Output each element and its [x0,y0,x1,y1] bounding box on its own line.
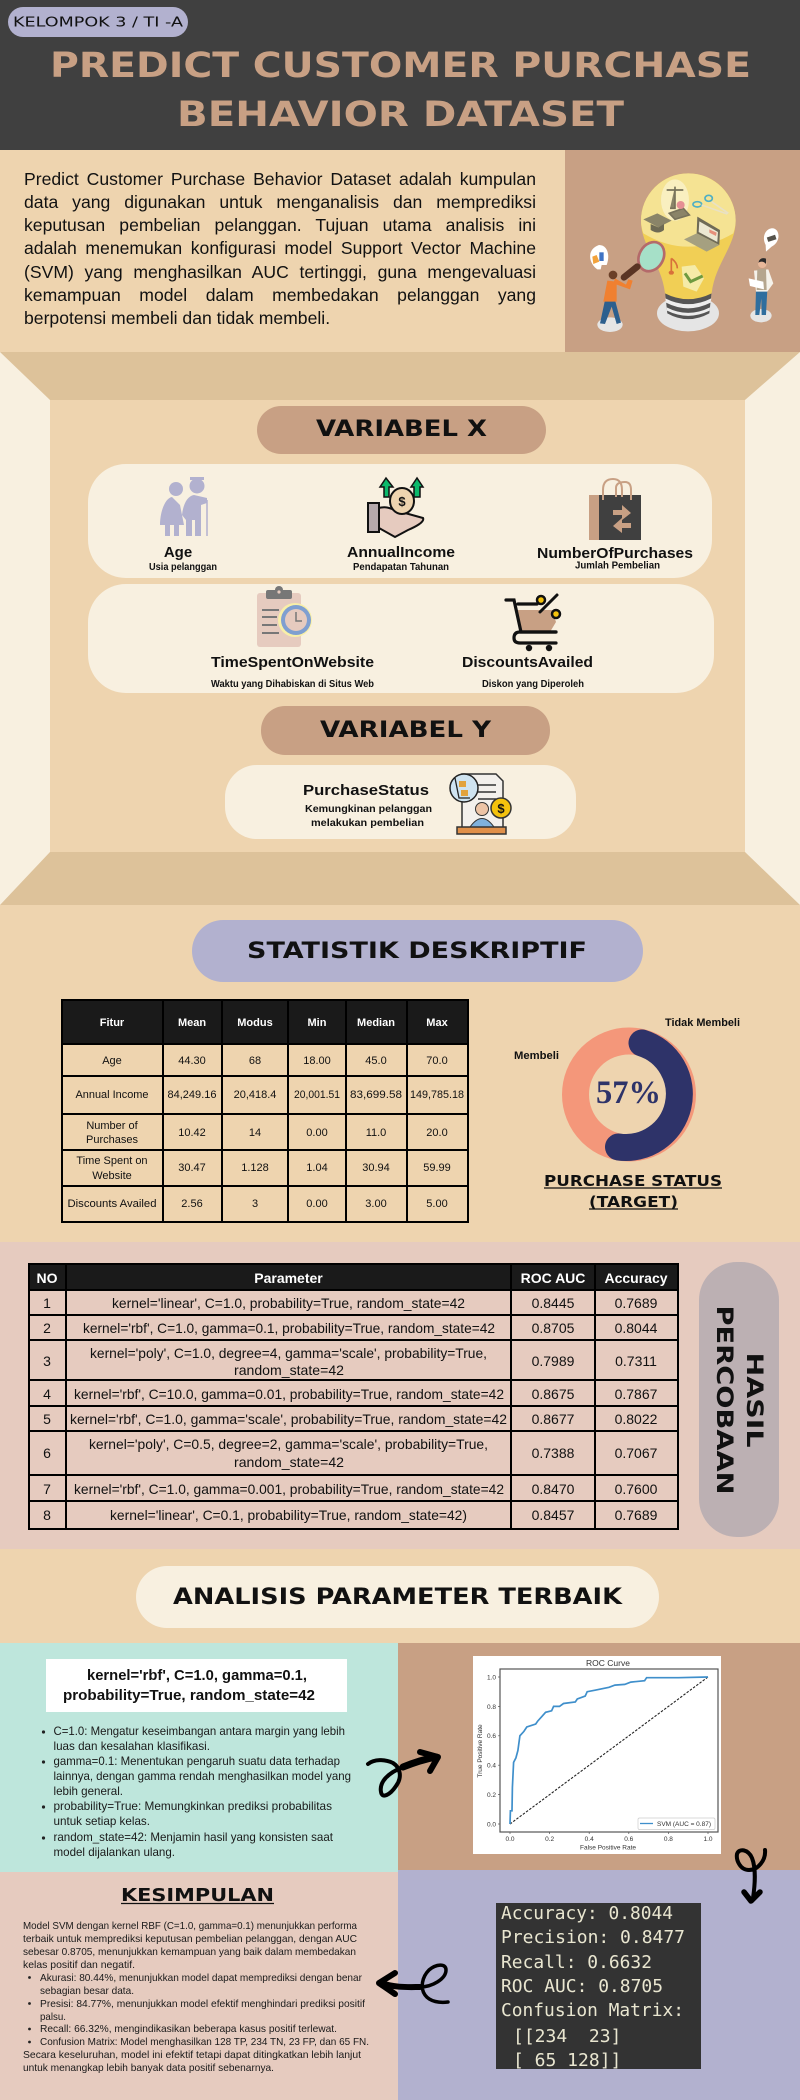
table: experiment results: 0.7689 [615,1295,658,1311]
conclusion text: Model SVM dengan kernel RBF (C=1.0, gamma=0.1) menunjukkan performa [23,1920,357,1932]
chart: roc curve: 0.6 [624,1836,634,1843]
table: descriptive statistics: 3.00 [365,1198,387,1210]
conclusion text: kelas positif dan negatif. [23,1959,135,1971]
table: descriptive statistics: 0.00 [306,1198,328,1210]
table: descriptive statistics: 20.0 [426,1127,448,1139]
group badge [8,7,188,37]
table: experiment results: 0.7689 [615,1507,658,1523]
table: descriptive statistics: Number of [86,1120,139,1132]
card: purchase status [225,765,576,839]
table: experiment results: 0.8470 [532,1481,575,1497]
table: descriptive statistics: 59.99 [423,1162,451,1174]
table: descriptive statistics: Discounts Availed [68,1198,156,1210]
side label: hasil percobaan: PERCOBAAN [711,1306,736,1494]
table: descriptive statistics: 1.04 [306,1162,328,1174]
heading: variabel x: VARIABEL X [316,417,487,442]
table: experiment results: 6 [43,1445,51,1461]
heading: variabel y [261,706,550,755]
arrow: roc curve to metrics [737,1850,765,1901]
table: experiment results: kernel='rbf', C=1.0, gamma=0.001, probability=True, random_state=42 [74,1481,504,1497]
best parameter box [46,1659,347,1712]
table: descriptive statistics: 70.0 [426,1055,448,1067]
table: descriptive statistics: Age [102,1055,122,1067]
table: experiment results: random_state=42 [234,1362,344,1378]
table: descriptive statistics: 10.42 [178,1127,206,1139]
table: descriptive statistics: 30.94 [362,1162,390,1174]
table: experiment results: kernel='poly', C=1.0, degree=4, gamma='scale', probability=True, [90,1345,487,1361]
intro paragraph: keputusan pembelian pelanggan. Tujuan utama analisis ini [24,215,536,235]
chart: roc curve: 0.0 [487,1822,496,1828]
chart caption: PURCHASE STATUS [544,1172,722,1190]
parameter bullet list: gamma=0.1: Menentukan pengaruh suatu data terhadap [54,1754,340,1768]
icon: shopping bag [589,479,641,540]
table: experiment results: 8 [43,1507,51,1523]
title: BEHAVIOR DATASET [177,95,624,135]
heading: analisis parameter terbaik: ANALISIS PARAMETER TERBAIK [173,1585,623,1610]
metrics console: ROC AUC: 0.8705 [501,1976,663,1997]
metrics console: [ 65 128]] [513,2050,621,2071]
table: experiment results: Accuracy [604,1270,668,1286]
table: experiment results: 0.7311 [615,1353,657,1369]
table: descriptive statistics: 11.0 [366,1127,386,1139]
parameter bullet list: lainnya, dengan gamma rendah menghasilkan model yang [54,1769,351,1783]
table: descriptive statistics: 83,699.58 [350,1089,402,1101]
chart: roc curve: 0.4 [585,1836,594,1843]
conclusion text: sebesar 0.8705, menunjukkan kemampuan yang baik dalam membedakan [23,1946,356,1958]
panel: descriptive statistics [0,905,800,1243]
chart: roc curve: False Positive Rate [580,1844,636,1852]
table: descriptive statistics: 14 [249,1127,261,1139]
table: descriptive statistics: 44.30 [178,1055,206,1067]
panel: introduction [0,150,565,353]
heading: variabel y: VARIABEL Y [320,718,492,743]
label: purchase status: PurchaseStatus [303,782,429,799]
table: descriptive statistics: Fitur [100,1017,125,1029]
table: descriptive statistics: Annual Income [76,1089,148,1101]
panel: model metrics [398,1870,800,2100]
conclusion text: Secara keseluruhan, model ini efektif tetapi dapat ditingkatkan lebih lanjut [23,2049,361,2061]
title [50,46,751,135]
card: x variables row 1 [88,464,712,578]
table: descriptive statistics: Purchases [86,1134,138,1146]
label: number of purchases [537,545,693,572]
intro paragraph: (SVM) yang menghasilkan AUC tertinggi, guna mengevaluasi [24,262,536,282]
card: x variables row 2 [88,584,714,693]
best parameter box: probability=True, random_state=42 [63,1687,315,1704]
best parameter box: kernel='rbf', C=1.0, gamma=0.1, [87,1667,307,1684]
table: descriptive statistics: 20,418.4 [234,1089,276,1101]
parameter bullet list: probability=True: Memungkinkan prediksi probabilitas [54,1799,332,1813]
donut label: membeli: Membeli [514,1050,559,1062]
donut value: 57% [596,1075,661,1111]
table: experiment results: 2 [43,1320,51,1336]
table: experiment results: 0.8022 [615,1411,658,1427]
table: experiment results: random_state=42 [234,1454,344,1470]
table: experiment results: 1 [43,1295,51,1311]
table: descriptive statistics: 45.0 [365,1055,387,1067]
heading: statistik deskriptif: STATISTIK DESKRIPTIF [247,939,587,964]
chart caption [544,1172,722,1211]
conclusion text: Recall: 66.32%, mengindikasikan beberapa kasus positif terlewat. [40,2023,337,2035]
label: purchase status: Kemungkinan pelanggan [305,803,432,815]
table: descriptive statistics: 84,249.16 [168,1089,216,1101]
table: experiment results: 5 [43,1411,51,1427]
heading: analisis parameter terbaik [136,1566,659,1628]
parameter bullet list: C=1.0: Mengatur keseimbangan antara margin yang lebih [54,1724,345,1738]
chart: purchase status donut [576,1041,682,1148]
metrics console: [[234 23] [513,2026,621,2047]
table: experiment results: 0.7989 [532,1353,575,1369]
table: experiment results: 4 [43,1386,51,1402]
table: experiment results: 0.8705 [532,1320,575,1336]
table: experiment results: kernel='rbf', C=1.0, gamma='scale', probability=True, random_state=42 [70,1411,507,1427]
table: experiment results: kernel='rbf', C=10.0, gamma=0.01, probability=True, random_state=42 [74,1386,504,1402]
panel: illustration [565,150,800,353]
label: time spent on website: TimeSpentOnWebsite [211,654,374,671]
panel: variables room [0,352,800,905]
chart: roc curve: ROC Curve [586,1658,630,1668]
table: experiment results: 0.8677 [532,1411,575,1427]
chart: roc curve [473,1656,721,1854]
chart: roc curve: 0.0 [505,1836,515,1843]
table: descriptive statistics: Mean [178,1017,206,1029]
label: annual income [347,544,455,573]
label: age: Usia pelanggan [149,562,217,573]
table: experiment results: ROC AUC [521,1270,585,1286]
heading: kesimpulan: KESIMPULAN [121,1885,274,1906]
table: experiment results: 0.8675 [532,1386,575,1402]
conclusion text: Confusion Matrix: Model menghasilkan 128 TP, 234 TN, 23 FP, dan 65 FN. [40,2036,369,2048]
parameter bullet list [42,1724,351,1859]
chart: roc curve: SVM (AUC = 0.87) [657,1821,711,1828]
chart: roc curve: 0.6 [487,1733,496,1740]
conclusion text: untuk menangkap lebih banyak data positif sebenarnya. [23,2062,274,2074]
table: descriptive statistics: Max [426,1017,449,1029]
table: descriptive statistics [62,1000,468,1222]
parameter bullet list: untuk setiap kelas. [54,1814,150,1828]
metrics console [496,1903,701,2071]
table: descriptive statistics: Website [92,1170,132,1182]
chart: roc curve: 1.0 [703,1836,713,1843]
conclusion text: sebagian besar data. [40,1985,134,1997]
icon: shopping cart with percent [506,595,560,651]
table: descriptive statistics: 5.00 [426,1198,448,1210]
table: experiment results: 0.8457 [532,1507,575,1523]
table: descriptive statistics: 18.00 [303,1055,331,1067]
conclusion text: palsu. [40,2011,66,2023]
label: age: Age [164,544,192,561]
intro paragraph: kemampuan model dalam membedakan pelanggan yang [24,285,536,305]
label: time spent on website: Waktu yang Dihabiskan di Situs Web [211,679,374,690]
panel: roc curve [398,1643,800,1870]
chart: roc curve: 0.4 [487,1762,496,1770]
conclusion text: Presisi: 84.77%, menunjukkan model efektif menghindari prediksi positif [40,1998,365,2010]
icon: purchase document [450,774,511,834]
icon: purchase document: $ [497,801,505,816]
chart: roc curve: 1.0 [487,1674,496,1682]
chart: roc curve: 0.8 [664,1836,673,1843]
table: experiment results: 0.7600 [615,1481,658,1497]
label: discounts availed: Diskon yang Diperoleh [482,679,584,690]
table: descriptive statistics: Modus [237,1017,273,1029]
panel: parameter explanation [0,1643,398,1872]
intro paragraph: data yang digunakan untuk menganalisis dan memprediksi [24,192,536,212]
table: descriptive statistics: 3 [252,1198,258,1210]
chart caption: (TARGET) [589,1193,678,1211]
table: descriptive statistics: 1.128 [241,1162,269,1174]
conclusion text: Akurasi: 80.44%, menunjukkan model dapat memprediksi dengan benar [40,1972,362,1984]
table: experiment results: 0.7388 [532,1445,575,1461]
metrics console: Accuracy: 0.8044 [501,1903,673,1924]
label: time spent on website [211,654,374,690]
group badge: KELOMPOK 3 / TI -A [13,16,183,30]
parameter bullet list: luas dan kesalahan klasifikasi. [54,1739,210,1753]
metrics console: Confusion Matrix: [501,2000,684,2021]
panel: experiment results [0,1242,800,1549]
heading: statistik deskriptif [192,920,643,982]
table: descriptive statistics: 149,785.18 [410,1089,464,1101]
parameter bullet list: random_state=42: Menjamin hasil yang konsisten saat [54,1830,334,1844]
label: purchase status: melakukan pembelian [311,817,424,829]
table: descriptive statistics: Time Spent on [76,1155,148,1167]
arrow: metrics to conclusion [379,1965,448,2002]
label: discounts availed [462,654,593,690]
icon: elderly couple [160,477,207,536]
icon: hand with coin and arrows [368,478,423,537]
chart: roc curve: 0.2 [545,1836,554,1843]
metrics console: Precision: 0.8477 [501,1927,685,1948]
icon: clipboard with clock [257,586,312,647]
panel: conclusion [0,1872,398,2100]
intro paragraph: adalah menemukan konfigurasi model Support Vector Machine [24,238,536,258]
conclusion text [23,1920,369,2074]
panel: header [0,0,800,150]
table: experiment results [29,1264,678,1529]
table: experiment results: kernel='linear', C=1.0, probability=True, random_state=42 [112,1295,465,1311]
label: discounts availed: DiscountsAvailed [462,654,593,671]
label: age [149,544,217,573]
intro paragraph: Predict Customer Purchase Behavior Dataset adalah kumpulan [24,169,536,189]
table: experiment results: kernel='linear', C=0.1, probability=True, random_state=42) [110,1507,467,1523]
table: experiment results: NO [36,1270,58,1286]
table: descriptive statistics: 0.00 [306,1127,328,1139]
parameter bullet list: lebih general. [54,1784,123,1798]
side label: hasil percobaan: HASIL [741,1352,766,1448]
heading: variabel x [257,406,546,454]
label: annual income: Pendapatan Tahunan [353,562,449,573]
donut label: tidak membeli: Tidak Membeli [665,1017,740,1029]
table: experiment results: 0.8445 [532,1295,575,1311]
table: experiment results: 0.7067 [615,1445,658,1461]
table: experiment results: 3 [43,1353,51,1369]
label: number of purchases: Jumlah Pembelian [575,560,660,572]
label: purchase status [303,782,432,829]
table: descriptive statistics: 68 [249,1055,261,1067]
table: descriptive statistics: 2.56 [181,1198,203,1210]
table: experiment results: Parameter [254,1270,323,1286]
label: annual income: AnnualIncome [347,544,455,561]
table: descriptive statistics: Median [357,1017,395,1029]
table: experiment results: kernel='poly', C=0.5, degree=2, gamma='scale', probability=True, [89,1436,488,1452]
table: experiment results: 7 [43,1481,51,1497]
side label: hasil percobaan [699,1262,779,1537]
table: descriptive statistics: 20,001.51 [294,1089,340,1101]
chart: roc curve: 0.2 [487,1792,496,1799]
icon: light bulb with researchers [590,173,778,332]
metrics console: Recall: 0.6632 [501,1952,652,1973]
chart: roc curve: True Positive Rate [477,1724,484,1778]
title: PREDICT CUSTOMER PURCHASE [50,46,751,86]
parameter bullet list: model dijalankan ulang. [54,1845,175,1859]
arrow: parameters to roc curve [368,1752,438,1796]
table: experiment results: 0.8044 [615,1320,658,1336]
table: experiment results: 0.7867 [615,1386,658,1402]
conclusion text: terbaik untuk memprediksi keputusan pembelian pelanggan, dengan AUC [23,1933,357,1945]
chart: roc curve: 0.8 [487,1704,496,1711]
panel: best parameter heading band [0,1549,800,1643]
table: descriptive statistics: Min [308,1017,327,1029]
table: experiment results: kernel='rbf', C=1.0, gamma=0.1, probability=True, random_state=42 [83,1320,495,1336]
intro paragraph [24,168,554,338]
label: number of purchases: NumberOfPurchases [537,545,693,562]
intro paragraph: berpotensi membeli dan tidak membeli. [24,308,330,328]
icon: hand with coin and arrows: $ [398,494,406,509]
table: descriptive statistics: 30.47 [178,1162,206,1174]
